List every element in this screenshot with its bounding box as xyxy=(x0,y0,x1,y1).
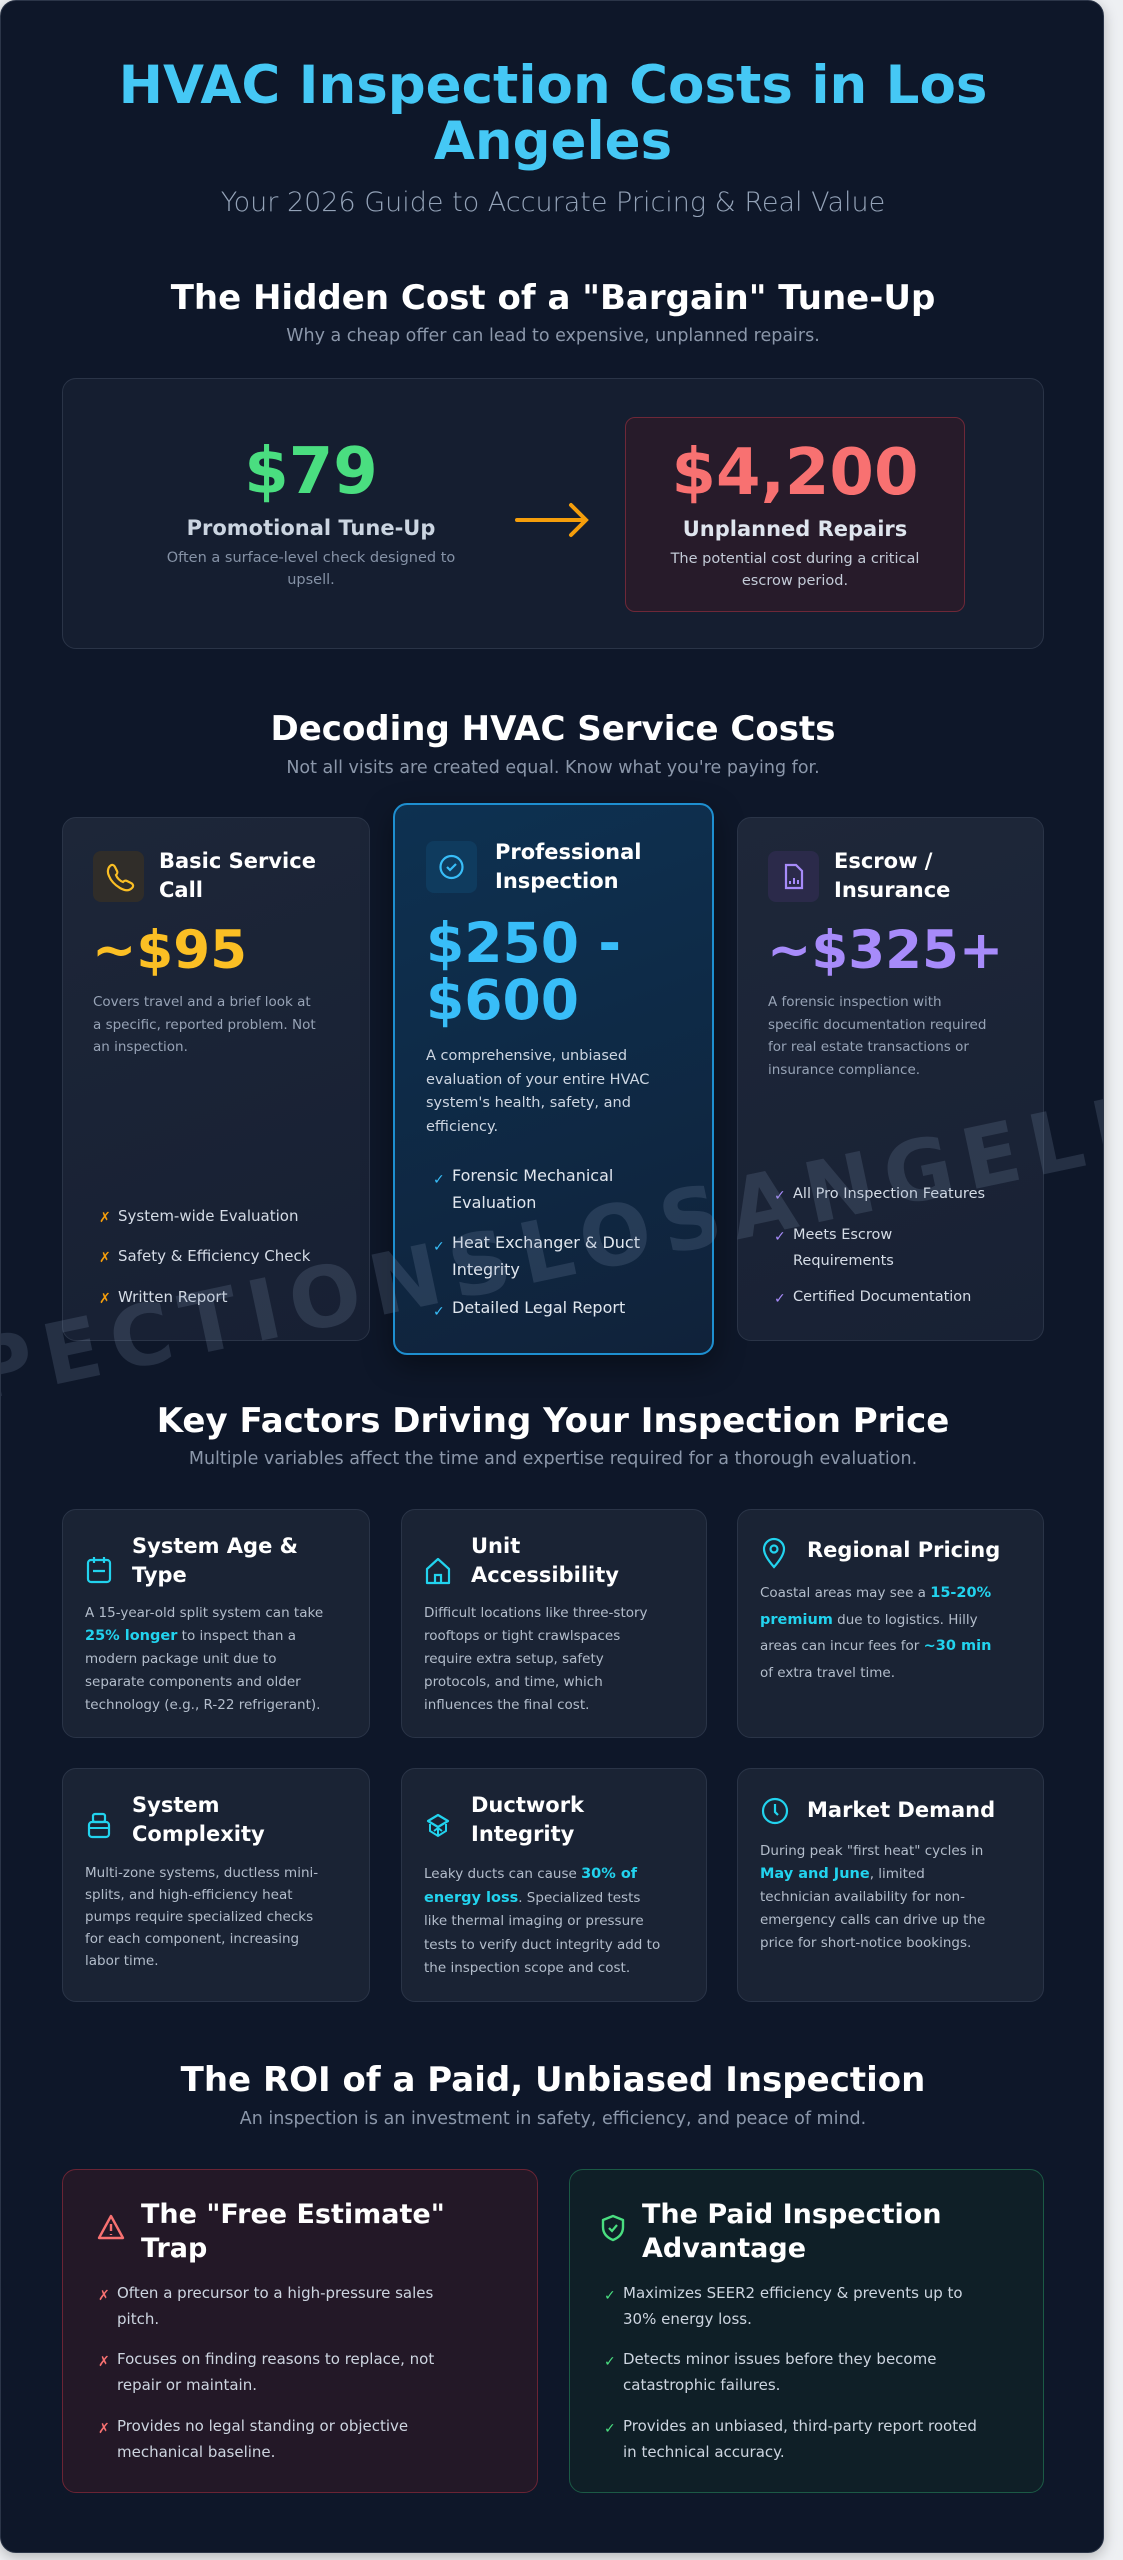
subheading: decoding: Not all visits are created equal. Know what you're paying for. xyxy=(286,758,820,778)
text: emergency calls can drive up the xyxy=(760,1912,985,1928)
callout: repair cost: Unplanned Repairs xyxy=(683,517,907,541)
icon: duct xyxy=(426,1814,450,1838)
text: splits, and high-efficiency heat xyxy=(85,1887,293,1903)
list xyxy=(604,2284,963,2328)
title: HVAC Inspection Costs in Los xyxy=(119,55,987,116)
text: of extra travel time. xyxy=(760,1664,895,1680)
panel: free estimate trap xyxy=(62,2169,538,2493)
text: Leaky ducts can cause 30% of xyxy=(424,1866,637,1882)
title: Accessibility xyxy=(471,1563,619,1587)
heading: hidden cost: The Hidden Cost of a "Bargain" Tune-Up xyxy=(171,278,935,318)
icon: map pin xyxy=(762,1538,786,1568)
subheading: key factors: Multiple variables affect the time and expertise required for a thorough evaluation. xyxy=(189,1449,917,1469)
title xyxy=(495,840,642,893)
title: The Paid Inspection xyxy=(642,2199,942,2230)
text: tests to verify duct integrity add to xyxy=(424,1936,660,1952)
icon: document xyxy=(768,851,819,902)
title xyxy=(159,849,316,902)
panel: escrow insurance: ✓ xyxy=(774,1188,786,1204)
text: like thermal imaging or pressure xyxy=(424,1913,644,1929)
panel: basic service call: ✗ xyxy=(99,1291,111,1307)
panel: regional pricing xyxy=(737,1509,1044,1738)
icon: calendar xyxy=(86,1557,112,1584)
description xyxy=(426,1048,649,1134)
description: A comprehensive, unbiased xyxy=(426,1048,627,1064)
panel: basic service call: Written Report xyxy=(118,1288,227,1306)
price: $250 - xyxy=(426,911,621,975)
callout: repair cost: escrow period. xyxy=(742,573,848,589)
callout: repair cost: $4,200 xyxy=(672,436,918,510)
title: System xyxy=(132,1793,219,1817)
panel: paid inspection advantage: ✓ xyxy=(604,2288,616,2304)
text: Difficult locations like three-story xyxy=(424,1605,648,1621)
icon: check circle xyxy=(426,841,477,893)
title: Unit xyxy=(471,1534,520,1558)
title xyxy=(642,2199,942,2264)
title xyxy=(132,1793,265,1846)
text: labor time. xyxy=(85,1953,158,1969)
text: areas can incur fees for ~30 min xyxy=(760,1638,991,1654)
arrow xyxy=(515,502,589,538)
promo price: Promotional Tune-Up xyxy=(187,516,435,540)
title xyxy=(141,2199,445,2264)
description: for real estate transactions or xyxy=(768,1039,969,1055)
text xyxy=(85,1865,318,1969)
list: All Pro Inspection Features xyxy=(793,1186,985,1202)
panel: paid inspection advantage: ✓ xyxy=(604,2421,616,2437)
panel: system age xyxy=(62,1509,370,1738)
title: Angeles xyxy=(434,111,672,172)
title: System Age & xyxy=(132,1534,298,1558)
title: Advantage xyxy=(642,2233,806,2264)
promo price: $79 xyxy=(244,435,378,509)
text: influences the final cost. xyxy=(424,1697,589,1713)
title: Integrity xyxy=(471,1822,574,1846)
icon: shield xyxy=(602,2214,624,2242)
description xyxy=(768,994,986,1078)
list: System-wide Evaluation xyxy=(118,1207,298,1225)
panel: paid inspection advantage xyxy=(569,2169,1044,2493)
icon: clock xyxy=(762,1798,788,1824)
title xyxy=(471,1534,619,1587)
text: require extra setup, safety xyxy=(424,1651,604,1667)
heading: ROI: The ROI of a Paid, Unbiased Inspection xyxy=(181,2060,925,2100)
text xyxy=(85,1605,323,1713)
panel: professional inspection: ✓ xyxy=(433,1172,445,1188)
panel: free estimate trap: ✗ xyxy=(98,2288,110,2304)
description: A forensic inspection with xyxy=(768,994,942,1010)
description: a specific, reported problem. Not xyxy=(93,1016,316,1032)
title: Escrow / xyxy=(834,849,932,873)
text: protocols, and time, which xyxy=(424,1674,603,1690)
title xyxy=(471,1793,584,1846)
description: system's health, safety, and xyxy=(426,1095,631,1111)
text: Multi-zone systems, ductless mini- xyxy=(85,1865,318,1881)
text: pumps require specialized checks xyxy=(85,1909,313,1925)
list: Forensic Mechanical xyxy=(452,1166,613,1185)
panel: professional inspection: Integrity xyxy=(452,1260,520,1279)
panel: professional inspection: Detailed Legal Report xyxy=(452,1298,625,1317)
panel: free estimate trap: ✗ xyxy=(98,2421,110,2437)
text: rooftops or tight crawlspaces xyxy=(424,1628,620,1644)
text xyxy=(760,1585,991,1680)
title: Market Demand xyxy=(807,1798,995,1822)
panel: escrow insurance: Certified Documentation xyxy=(793,1289,971,1305)
title: Trap xyxy=(141,2233,207,2264)
text: separate components and older xyxy=(85,1674,301,1690)
title: Type xyxy=(132,1563,187,1587)
list: Often a precursor to a high-pressure sales xyxy=(117,2284,433,2302)
title: Regional Pricing xyxy=(807,1538,1000,1562)
title: Call xyxy=(159,878,203,902)
text: 25% longer to inspect than a xyxy=(85,1628,296,1644)
panel: professional inspection: Heat Exchanger & Duct xyxy=(452,1233,640,1252)
text xyxy=(424,1866,660,1976)
icon: warning xyxy=(98,2214,124,2240)
panel: bargain comparison xyxy=(62,378,1044,649)
panel: paid inspection advantage: Detects minor issues before they become xyxy=(623,2350,936,2368)
description: Covers travel and a brief look at xyxy=(93,994,311,1010)
title: Ductwork xyxy=(471,1793,584,1817)
price: ~$325+ xyxy=(767,920,1003,981)
panel: professional inspection xyxy=(393,803,714,1355)
panel: escrow insurance: ✓ xyxy=(774,1229,786,1245)
list: Maximizes SEER2 efficiency & prevents up to xyxy=(623,2284,963,2302)
panel: unit accessibility xyxy=(401,1509,707,1738)
panel: paid inspection advantage: Provides an unbiased, third-party report rooted xyxy=(623,2417,977,2435)
description: an inspection. xyxy=(93,1039,188,1055)
price: ~$95 xyxy=(92,920,247,981)
panel: basic service call: ✗ xyxy=(99,1250,111,1266)
text xyxy=(424,1605,648,1713)
promo price: upsell. xyxy=(287,572,335,588)
text: premium due to logistics. Hilly xyxy=(760,1612,978,1628)
text: technology (e.g., R-22 refrigerant). xyxy=(85,1697,320,1713)
callout: repair cost xyxy=(625,417,965,612)
title: Insurance xyxy=(834,878,950,902)
text xyxy=(760,1843,985,1951)
title xyxy=(119,55,987,172)
panel: system complexity xyxy=(62,1768,370,2002)
heading: key factors: Key Factors Driving Your Inspection Price xyxy=(157,1401,949,1441)
panel: ductwork integrity xyxy=(401,1768,707,2002)
panel: free estimate trap: Focuses on finding reasons to replace, not xyxy=(117,2350,434,2368)
subheading: hidden cost: Why a cheap offer can lead to expensive, unplanned repairs. xyxy=(286,326,820,346)
title xyxy=(834,849,950,902)
promo price: Often a surface-level check designed to xyxy=(167,550,455,566)
panel: paid inspection advantage: in technical accuracy. xyxy=(623,2443,785,2461)
text: energy loss. Specialized tests xyxy=(424,1890,640,1906)
description xyxy=(93,994,316,1055)
panel: paid inspection advantage: catastrophic failures. xyxy=(623,2376,780,2394)
description: efficiency. xyxy=(426,1118,498,1134)
text: May and June, limited xyxy=(760,1866,925,1882)
panel: escrow insurance: Requirements xyxy=(793,1253,894,1269)
price: $600 xyxy=(426,968,579,1032)
panel: basic service call: Safety & Efficiency Check xyxy=(118,1247,310,1265)
list: pitch. xyxy=(117,2310,159,2328)
panel: free estimate trap: mechanical baseline. xyxy=(117,2443,275,2461)
text: price for short-notice bookings. xyxy=(760,1935,971,1951)
title: Complexity xyxy=(132,1822,265,1846)
list: 30% energy loss. xyxy=(623,2310,752,2328)
text: Coastal areas may see a 15-20% xyxy=(760,1585,991,1601)
title: Basic Service xyxy=(159,849,316,873)
text: for each component, increasing xyxy=(85,1931,299,1947)
title: Inspection xyxy=(495,869,619,893)
panel: paid inspection advantage: ✓ xyxy=(604,2354,616,2370)
icon: stacked unit xyxy=(88,1812,110,1838)
text: modern package unit due to xyxy=(85,1651,276,1667)
panel: free estimate trap: Provides no legal standing or objective xyxy=(117,2417,408,2435)
title: Professional xyxy=(495,840,642,864)
icon: house xyxy=(426,1558,450,1584)
panel: basic service call xyxy=(62,817,370,1341)
panel: professional inspection: ✓ xyxy=(433,1239,445,1255)
panel: free estimate trap: repair or maintain. xyxy=(117,2376,257,2394)
list xyxy=(98,2284,433,2328)
price xyxy=(426,911,621,1032)
panel: escrow insurance: Meets Escrow xyxy=(793,1227,892,1243)
title xyxy=(132,1534,298,1587)
text: A 15-year-old split system can take xyxy=(85,1605,323,1621)
panel: escrow insurance xyxy=(737,817,1044,1341)
text: technician availability for non- xyxy=(760,1889,965,1905)
text: the inspection scope and cost. xyxy=(424,1960,630,1976)
panel: free estimate trap: ✗ xyxy=(98,2354,110,2370)
panel: basic service call: ✗ xyxy=(99,1210,111,1226)
list xyxy=(433,1166,613,1212)
text: During peak "first heat" cycles in xyxy=(760,1843,983,1859)
promo price xyxy=(167,435,455,588)
description: evaluation of your entire HVAC xyxy=(426,1072,649,1088)
icon: phone xyxy=(93,851,144,902)
panel: escrow insurance: ✓ xyxy=(774,1291,786,1307)
panel: professional inspection: ✓ xyxy=(433,1304,445,1320)
panel: market demand xyxy=(737,1768,1044,2002)
subheading: ROI: An inspection is an investment in safety, efficiency, and peace of mind. xyxy=(240,2109,866,2129)
list: Evaluation xyxy=(452,1193,536,1212)
description: insurance compliance. xyxy=(768,1062,920,1078)
description: specific documentation required xyxy=(768,1016,986,1032)
subtitle: Your 2026 Guide to Accurate Pricing & Real Value xyxy=(221,187,885,218)
title: The "Free Estimate" xyxy=(141,2199,445,2230)
heading: decoding: Decoding HVAC Service Costs xyxy=(271,709,835,749)
callout: repair cost: The potential cost during a critical xyxy=(671,551,919,567)
